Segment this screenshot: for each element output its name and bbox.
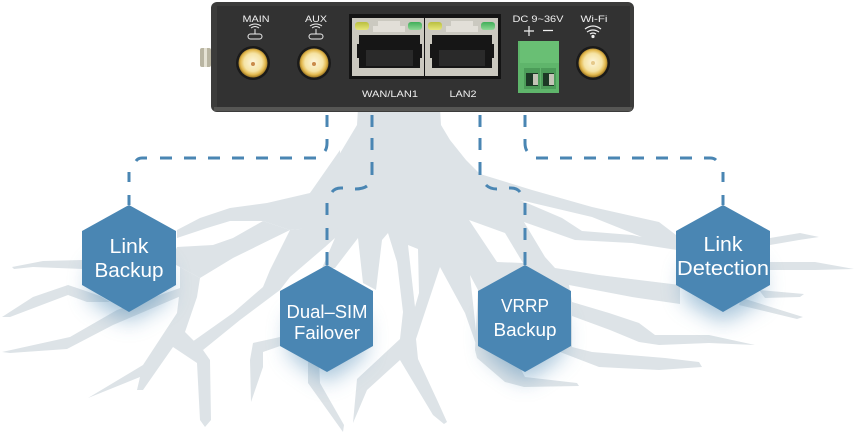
white gaps between roots [408,200,642,307]
dashed connector: Link Backup [129,115,327,205]
hexagon: Dual-SIM Failover: Failover [294,323,360,343]
dashed connector: VRRP Backup [480,115,525,265]
hexagon: Link Backup [82,205,176,312]
LAN2 ethernet port [425,14,501,79]
icon: MAIN antenna [248,24,262,39]
hexagon: Link Detection: Detection [677,258,769,280]
icon: Wi-Fi signal [585,26,601,38]
AUX connector [297,46,331,80]
green power terminal block [518,41,559,93]
Wi-Fi connector [576,46,610,80]
WAN/LAN1 label: WAN/LAN1 [362,89,418,100]
icon: AUX antenna [309,24,323,39]
hexagon: VRRP Backup [478,265,571,372]
AUX port label: AUX [305,14,328,25]
MAIN connector [236,46,270,80]
hexagon: Link Backup: Link [110,236,150,258]
hexagon shadows [90,240,762,382]
router body [211,2,634,112]
hexagon: Dual-SIM Failover [280,265,373,372]
root system background [2,108,854,432]
power voltage label: DC 9~36V [512,14,564,25]
dashed connector: Link Detection [525,115,723,205]
MAIN port label: MAIN [242,14,270,25]
Wi-Fi label: Wi-Fi [580,14,608,25]
WAN/LAN1 ethernet port [349,14,425,79]
hexagon: VRRP Backup: VRRP [501,296,549,316]
dashed connector: Dual-SIM Failover [327,115,372,265]
LAN2 label: LAN2 [450,89,476,100]
hexagon: Link Backup: Backup [94,260,164,282]
polarity symbols [524,26,553,36]
hexagon: Link Detection [676,205,770,312]
mounting screw [200,48,211,67]
hexagon: Dual-SIM Failover: Dual–SIM [286,302,368,322]
router device [200,2,634,112]
hexagon: Link Detection: Link [704,234,744,256]
hexagon: VRRP Backup: Backup [494,320,556,340]
